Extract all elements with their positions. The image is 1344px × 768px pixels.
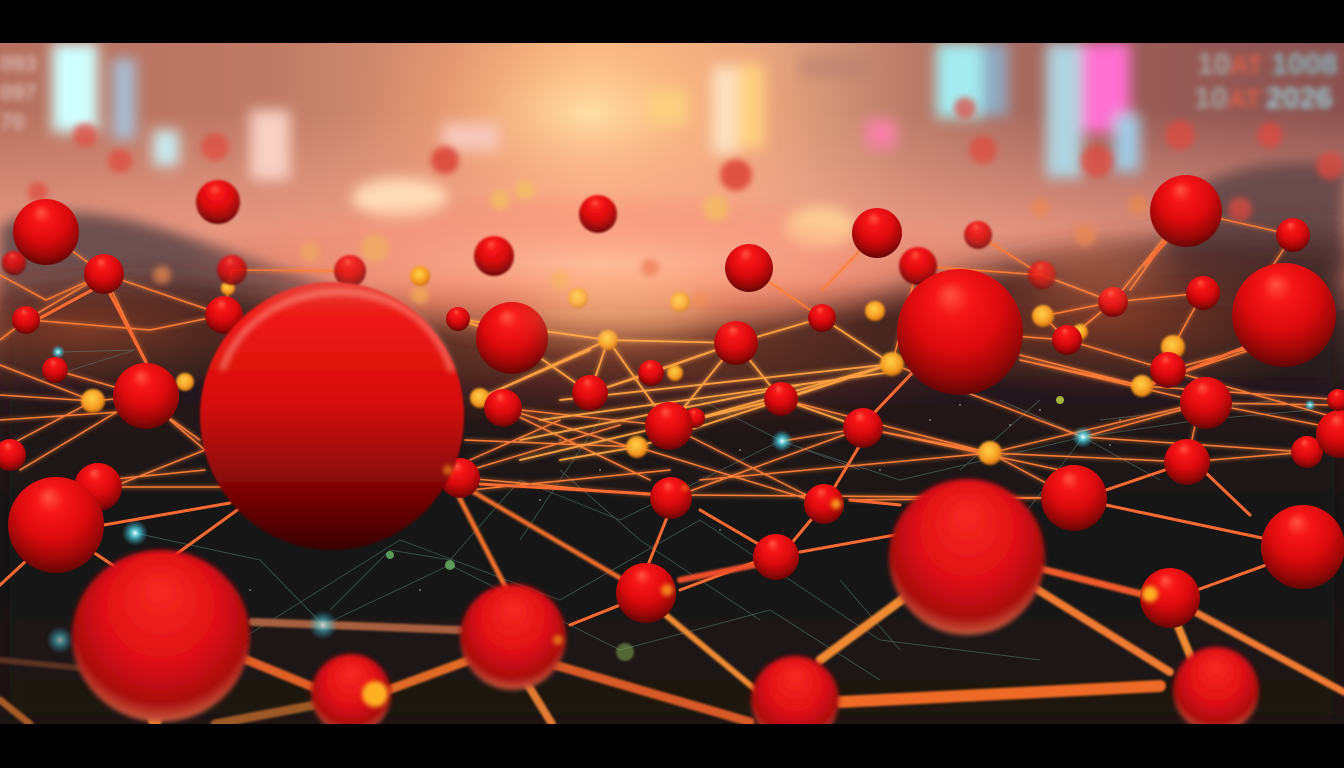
bokeh glow around the horizon xyxy=(530,250,1170,331)
blurred dashboard text top right xyxy=(1194,48,1338,115)
dark ground plane xyxy=(0,233,1344,724)
thin orange network links xyxy=(0,211,1344,504)
sphere: foreground right xyxy=(889,479,1045,635)
distant blurred spheres xyxy=(28,97,1344,307)
blurred dashboard text top left: 70 xyxy=(0,109,24,134)
sphere: giant central-left xyxy=(200,282,464,550)
fine white dust specks on ground xyxy=(249,404,1121,591)
blurred dashboard text top left: 093 xyxy=(0,51,37,76)
bright golden links at network centre xyxy=(458,318,892,460)
blurred dashboard text top left xyxy=(0,51,37,134)
distant hills xyxy=(0,162,1344,320)
blurred screen panels xyxy=(52,43,1140,180)
blurred dashboard text top left: 097 xyxy=(0,80,37,105)
thick foreground links xyxy=(0,490,1344,724)
golden reflections on spheres xyxy=(362,465,1158,707)
thin web of teal lines on ground xyxy=(40,350,1310,680)
blurred dashboard text top right: AT xyxy=(1228,84,1261,114)
blurred dashboard text top right: 2026 xyxy=(1266,82,1333,115)
horizon mist xyxy=(0,203,1272,421)
blurred background sky xyxy=(0,43,1344,358)
sparkle nodes xyxy=(46,345,1316,661)
foreground spheres along bottom xyxy=(311,584,1259,744)
sphere: far right xyxy=(1232,263,1336,367)
sphere: foreground left xyxy=(72,550,250,722)
blurred dashboard text top right: 1008 xyxy=(1271,48,1338,81)
blurred dashboard text top right: AT xyxy=(1230,50,1263,80)
small and mid red spheres xyxy=(0,175,1344,628)
blurred dashboard text top right: 10 xyxy=(1194,82,1227,115)
sphere: large right xyxy=(897,269,1023,395)
blurred dashboard text top right: 10 xyxy=(1197,48,1230,81)
yellow-orange small nodes xyxy=(81,266,1185,465)
medium orange links xyxy=(0,235,1280,625)
